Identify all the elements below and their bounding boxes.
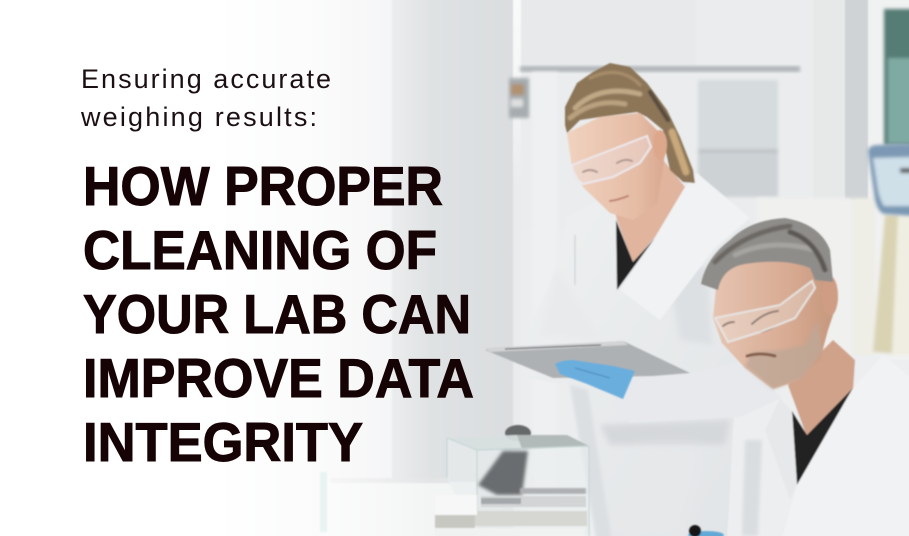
woman collar [620,173,750,320]
balance mechanism [481,488,586,507]
white cabinet [757,198,853,368]
woman face [567,113,667,220]
woman black undershirt [616,220,655,290]
man ear [822,276,838,316]
main headline: CLEANING OF [83,219,437,281]
subtitle [80,64,331,132]
cabinet rail [520,66,800,72]
main headline [83,155,474,473]
blue instrument display [868,144,909,216]
teal panel [884,9,909,145]
pen and glove [688,525,724,536]
cabinet window [698,80,778,197]
man face [713,255,838,389]
woman neck [612,160,685,262]
subtitle: Ensuring accurate [81,64,331,94]
balance base [320,472,477,536]
man eyes and mouth [723,311,778,356]
blue glove [555,360,635,399]
main headline: HOW PROPER [83,155,443,217]
woman hair [565,63,695,183]
dark object inside [478,451,528,495]
main headline: INTEGRITY [83,411,363,473]
white fade panel [0,0,432,536]
steel bar [435,511,587,528]
subtitle: weighing results: [80,102,317,132]
woman's sleeve [610,361,782,423]
wall switch [509,78,529,118]
glass box [447,435,589,536]
balance weighing pan knob [505,425,531,441]
glass draft shield on balance [435,425,589,536]
woman coat [527,173,750,536]
woman ear [653,130,667,160]
man beard [745,320,822,389]
man collar [780,355,909,536]
man safety goggles [715,281,815,342]
tablet [485,341,690,378]
man in lab coat [688,218,909,536]
man coat [727,355,909,536]
man neck [788,340,855,437]
man hair [701,218,833,290]
woman eyes and mouth [583,160,632,201]
main headline: YOUR LAB CAN [83,283,471,345]
man black undershirt [792,388,853,485]
main headline: IMPROVE DATA [83,347,474,409]
woman in lab coat [527,63,750,536]
woman safety goggles [572,136,651,184]
beige post [853,198,909,358]
